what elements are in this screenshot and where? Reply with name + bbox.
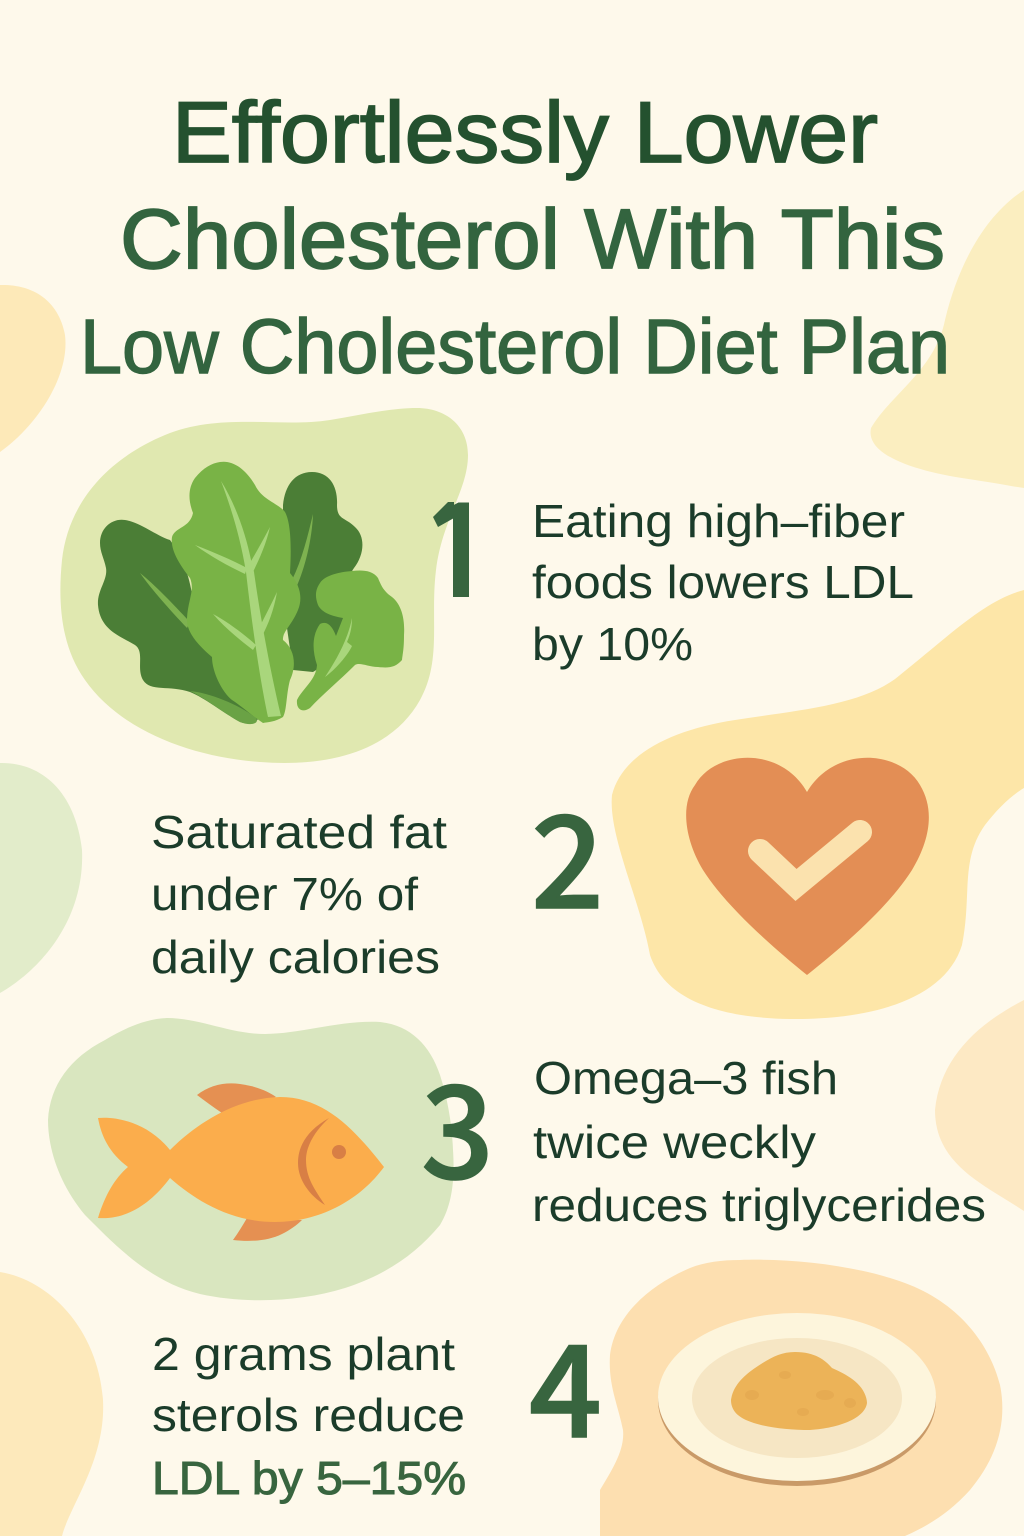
text block: step 3: Omega–3 fish	[534, 1052, 838, 1104]
text block: step 3: reduces triglycerides	[532, 1179, 986, 1231]
icon: leafy greens and broccoli	[98, 462, 404, 724]
text block: step 3: twice weckly	[533, 1116, 816, 1168]
text block: step 1	[532, 495, 914, 670]
panel: step 1 high-fiber foods	[60, 408, 497, 763]
text block: step 2	[151, 806, 447, 983]
title: Cholesterol With This	[120, 192, 945, 286]
number 2: 2	[531, 760, 604, 945]
title: Low Cholesterol Diet Plan	[80, 304, 950, 390]
text block: step 4: LDL by 5–15%	[152, 1452, 466, 1504]
text block: step 1: by 10%	[532, 618, 693, 670]
text block: step 3	[532, 1052, 986, 1231]
title: Effortlessly Lower	[172, 85, 878, 181]
text block: step 1: Eating high–fiber	[532, 495, 905, 547]
green blob background	[48, 1018, 454, 1300]
icon: fish	[98, 1083, 384, 1241]
number 1	[433, 502, 469, 597]
text block: step 1: foods lowers LDL	[532, 556, 914, 608]
icon: plate with plant sterols	[658, 1313, 936, 1486]
number 4: 4	[529, 1289, 602, 1474]
text block: step 4: 2 grams plant	[152, 1328, 455, 1380]
panel: step 2 heart	[531, 590, 1024, 1019]
peach blob background	[600, 1260, 1002, 1536]
number 1: 1	[424, 449, 497, 634]
title	[80, 85, 950, 390]
text block: step 2: under 7% of	[151, 868, 418, 920]
text block: step 4	[152, 1328, 466, 1504]
icon: heart with check	[686, 758, 929, 975]
panel: step 3 omega-3 fish	[48, 1018, 494, 1300]
text block: step 2: daily calories	[151, 931, 440, 983]
panel: step 4 plant sterols	[529, 1260, 1002, 1536]
green blob background	[60, 408, 468, 763]
number 3: 3	[421, 1030, 494, 1215]
yellow blob background	[612, 590, 1024, 1019]
text block: step 4: sterols reduce	[152, 1389, 465, 1441]
text block: step 2: Saturated fat	[151, 806, 447, 858]
